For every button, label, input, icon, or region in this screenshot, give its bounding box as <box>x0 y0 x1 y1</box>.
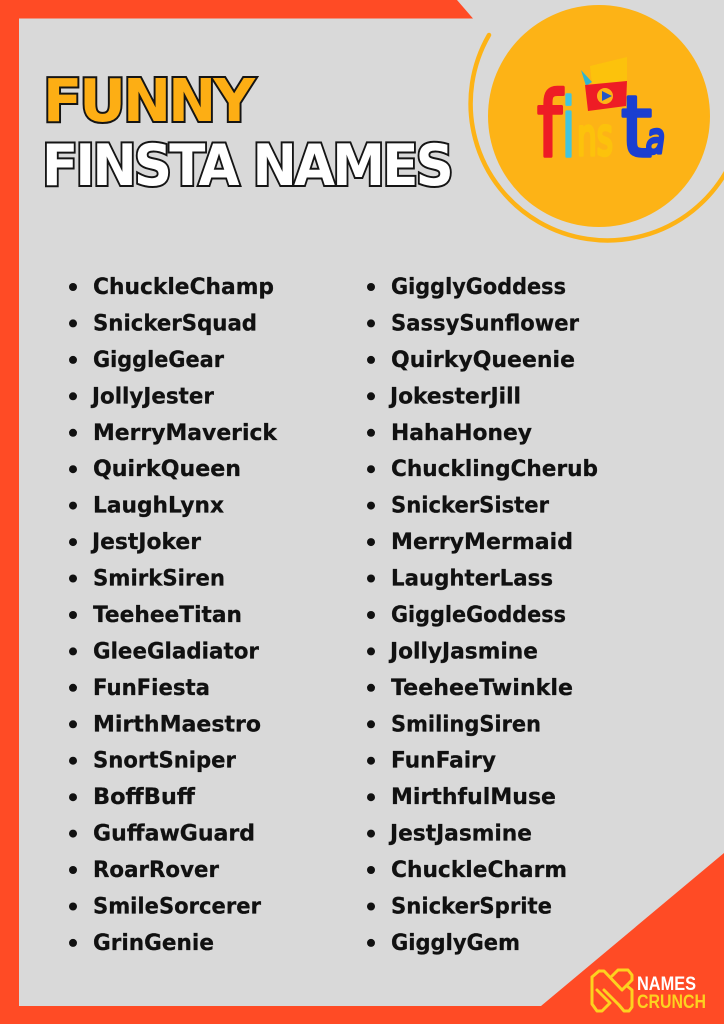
name item: SmilingSiren <box>391 712 541 737</box>
title line: FUNNY: FUNNY <box>43 66 256 135</box>
name item: GigglyGem <box>391 931 520 956</box>
name item: JokesterJill <box>388 384 521 409</box>
name item: TeeheeTwinkle <box>391 676 573 701</box>
logo letter t: t <box>621 78 652 176</box>
logo play <box>602 91 612 101</box>
logo spike <box>581 70 592 86</box>
orange frame: bottom corner wedge <box>0 853 724 1024</box>
name item: SnickerSprite <box>391 894 552 920</box>
name item: TeeheeTitan <box>93 603 242 628</box>
name item: LaughterLass <box>391 566 553 592</box>
name item: MerryMermaid <box>391 530 573 555</box>
name item: GiggleGear <box>93 348 224 373</box>
name item: SmileSorcerer <box>93 894 261 920</box>
name item: GleeGladiator <box>93 639 259 664</box>
brand logo: Names Crunch <box>592 970 706 1013</box>
name item: BoffBuff <box>93 785 196 810</box>
name item: SmirkSiren <box>93 566 225 592</box>
icon: N mark <box>592 970 632 1011</box>
brand word NAMES: NAMES <box>637 974 696 995</box>
name item: FunFairy <box>391 749 496 774</box>
name item: JestJoker <box>90 530 201 555</box>
logo camera <box>585 81 627 111</box>
name item: GigglyGoddess <box>391 275 566 300</box>
icon: finsta logo <box>537 57 665 178</box>
name item: ChucklingCherub <box>391 457 598 482</box>
yellow circle <box>488 5 710 227</box>
names list: left column <box>69 275 278 956</box>
name item: SassySunflower <box>391 311 579 336</box>
brand word CRUNCH: CRUNCH <box>637 992 706 1013</box>
name item: SnickerSister <box>391 494 549 519</box>
name item: ChuckleChamp <box>93 275 274 300</box>
names list: right column <box>367 275 598 956</box>
name item: MerryMaverick <box>93 421 278 446</box>
logo letter f: f <box>537 73 564 178</box>
name item: ChuckleCharm <box>391 858 567 883</box>
name item: JollyJasmine <box>388 639 538 664</box>
logo lens <box>597 88 613 104</box>
name item: RoarRover <box>93 858 219 883</box>
orange frame: top and left border <box>0 0 473 1024</box>
logo letter n s: ns <box>577 108 613 168</box>
logo flag <box>590 57 627 84</box>
name item: QuirkQueen <box>93 457 241 482</box>
name item: LaughLynx <box>93 494 224 519</box>
name item: SnortSniper <box>93 749 236 774</box>
logo letter i: i <box>562 82 575 175</box>
name item: JollyJester <box>90 384 214 409</box>
name item: GiggleGoddess <box>391 603 566 628</box>
name item: GuffawGuard <box>93 822 255 847</box>
logo letter a: a <box>646 114 665 163</box>
name item: FunFiesta <box>93 676 210 701</box>
name item: GrinGenie <box>93 931 214 956</box>
name item: QuirkyQueenie <box>391 348 575 373</box>
name item: MirthMaestro <box>93 712 261 737</box>
decorative ring arc <box>471 35 724 240</box>
name item: JestJasmine <box>388 822 532 847</box>
name item: SnickerSquad <box>93 311 257 336</box>
title <box>42 66 451 199</box>
name item: MirthfulMuse <box>391 785 556 810</box>
title line: FINSTA NAMES: FINSTA NAMES <box>42 133 451 199</box>
name item: HahaHoney <box>391 421 532 446</box>
